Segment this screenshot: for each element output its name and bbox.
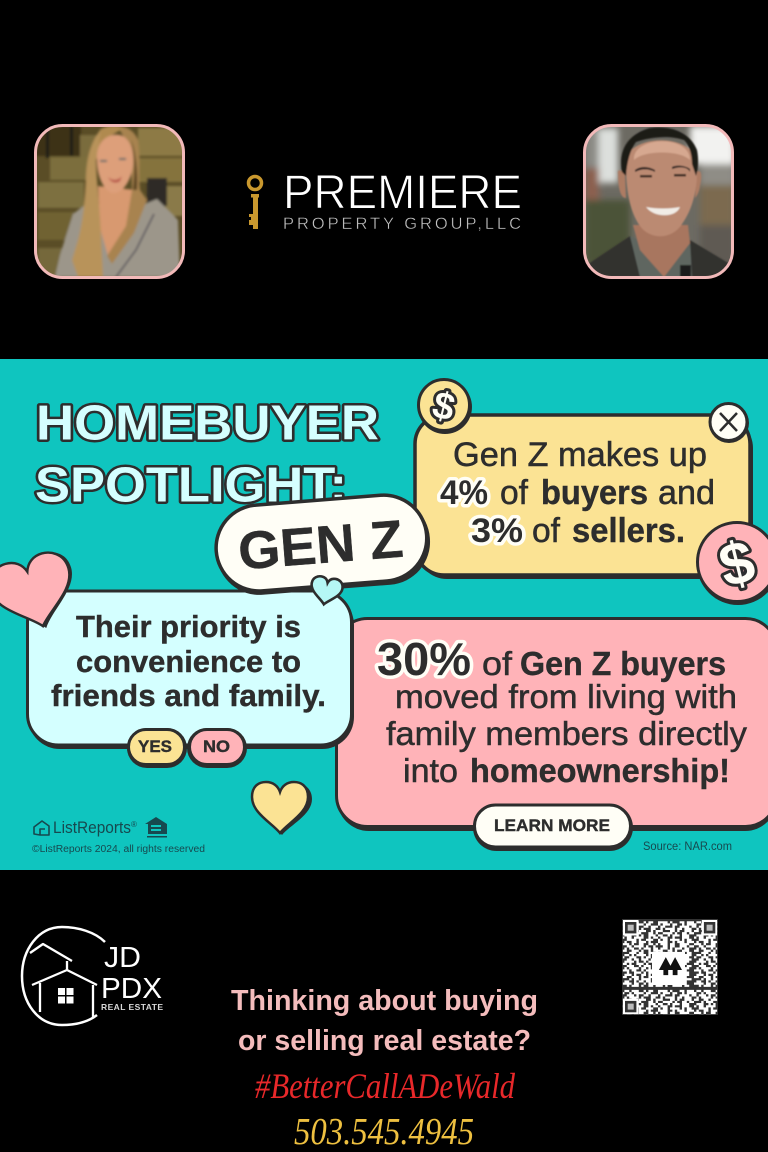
statistic text: 30% of Gen Z buyers: 30% [377, 633, 471, 685]
portrait: man [584, 126, 735, 278]
logo: Premiere Property Group [248, 166, 522, 233]
logo: JD PDX Real Estate [22, 927, 163, 1025]
button: learn more: LEARN MORE [494, 816, 610, 835]
statistic text: 30% of Gen Z buyers: homeownership! [470, 752, 730, 789]
statistic text: 30% of Gen Z buyers: of [482, 645, 513, 682]
stat text: 4% buyers, 3% sellers: of [532, 512, 561, 550]
icon: gold key [248, 176, 262, 229]
statistic text: 30% of Gen Z buyers: Gen Z buyers [520, 645, 726, 682]
icon: yellow dollar coin [418, 380, 472, 434]
tagline: PROPERTY GROUP,LLC [283, 215, 521, 233]
logo: JD PDX Real Estate: JD [104, 942, 141, 974]
statistic text: 30% of Gen Z buyers: family members directly [386, 715, 748, 752]
button: yes [127, 728, 187, 768]
source note: Source: NAR.com [643, 839, 732, 853]
stat text: 4% buyers, 3% sellers: Gen Z makes up [453, 436, 707, 474]
callout: Gen Z pill: GEN Z [236, 510, 405, 581]
panel: light blue priority box [28, 591, 354, 768]
statistic text: 30% of Gen Z buyers: into [403, 752, 458, 789]
QR code [622, 919, 718, 1015]
heading: Homebuyer Spotlight: HOMEBUYER [36, 396, 379, 450]
icon: pink dollar coin: $ [713, 527, 761, 600]
logo: JD PDX Real Estate: PDX [101, 973, 162, 1005]
copyright: ©ListReports 2024, all rights reserved [32, 844, 205, 855]
priority text: Their priority is [76, 609, 301, 644]
stat text: 4% buyers, 3% sellers: sellers. [572, 512, 685, 550]
stat text: 4% buyers, 3% sellers: and [658, 474, 715, 512]
heading: Homebuyer Spotlight [35, 396, 379, 512]
brand: ListReports credits [32, 817, 205, 855]
callout: Gen Z pill [213, 492, 433, 598]
icon: pink dollar coin [697, 522, 768, 605]
heading: Homebuyer Spotlight: SPOTLIGHT: [35, 458, 347, 512]
panel: yellow stat box [415, 415, 753, 579]
logo: JD PDX Real Estate: REAL ESTATE [101, 1002, 163, 1012]
wordmark: ListReports [53, 819, 131, 837]
registered mark: ® [131, 820, 137, 829]
priority text: convenience to [76, 644, 301, 679]
stat text: 4% buyers, 3% sellers: of [500, 474, 529, 512]
button: yes: YES [138, 737, 172, 756]
statistic text: 30% of Gen Z buyers [377, 633, 748, 789]
button: no [187, 728, 247, 768]
phone number: 503.545.4945 [294, 1111, 474, 1152]
portrait: woman [36, 126, 184, 278]
panel: pink statistic box [336, 618, 768, 851]
button: no: NO [203, 737, 230, 756]
question line 2: or selling real estate? [238, 1025, 531, 1057]
icon: pink heart [0, 547, 85, 640]
priority text [51, 609, 326, 713]
stat text: 4% buyers, 3% sellers: buyers [541, 474, 648, 512]
call to action text [231, 985, 538, 1152]
icon: close button [709, 403, 749, 443]
stat text: 4% buyers, 3% sellers: 3% [471, 512, 523, 550]
icon: equal housing [145, 817, 167, 838]
icon: yellow dollar coin: $ [428, 384, 459, 430]
priority text: friends and family. [51, 678, 326, 713]
button: learn more [473, 804, 633, 851]
panel: teal homebuyer spotlight [0, 359, 768, 870]
icon: small teal heart [308, 575, 344, 607]
stat text: 4% buyers, 3% sellers [440, 436, 715, 550]
icon: ListReports mark [34, 821, 49, 835]
wordmark: PREMIERE [283, 166, 522, 220]
statistic text: 30% of Gen Z buyers: moved from living with [395, 678, 737, 715]
question line 1: Thinking about buying [231, 985, 538, 1017]
stat text: 4% buyers, 3% sellers: 4% [440, 474, 488, 512]
icon: yellow heart [252, 782, 312, 835]
hashtag: #BetterCallADeWald [255, 1066, 516, 1106]
